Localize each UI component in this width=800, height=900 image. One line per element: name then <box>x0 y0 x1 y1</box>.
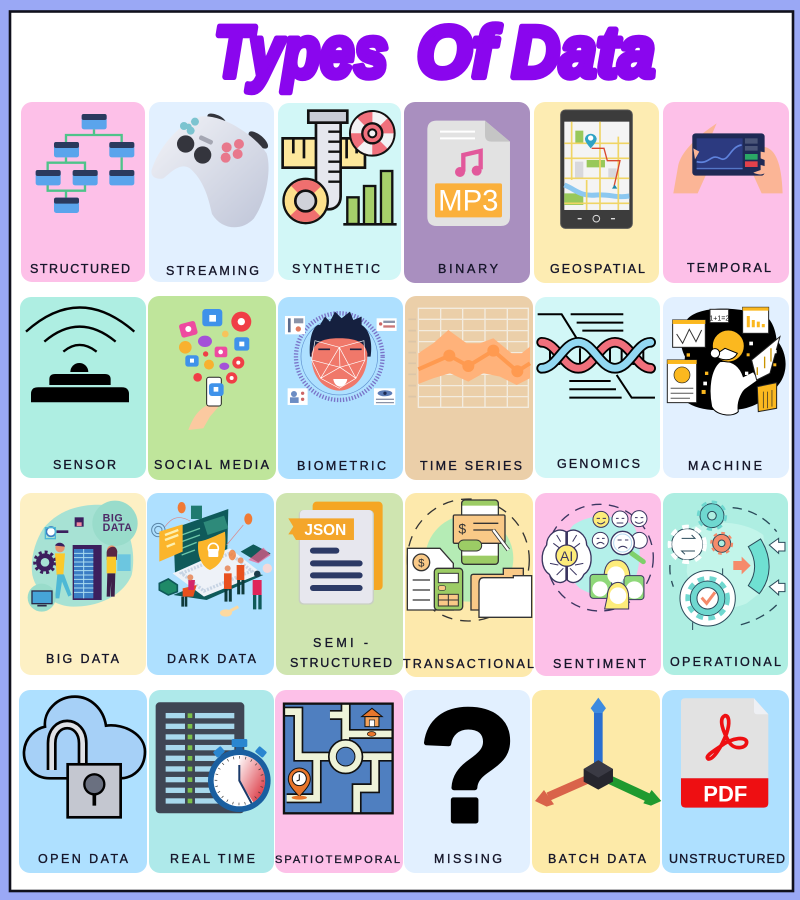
panel: structured <box>21 102 145 282</box>
icon: hierarchy tree <box>36 114 134 213</box>
icon: AI sentiment <box>542 504 653 611</box>
label: MACHINE <box>688 459 762 473</box>
title <box>214 13 655 93</box>
panel: real time <box>149 690 274 873</box>
panel: unstructured <box>662 690 789 873</box>
label: OPERATIONAL <box>670 655 781 669</box>
icon: MP3 file <box>427 121 510 226</box>
label: STRUCTURED <box>30 262 130 276</box>
panel: dark data <box>147 493 274 675</box>
icon: question mark: ? <box>419 676 517 855</box>
label: BATCH DATA <box>548 852 647 866</box>
icon: 3D axes <box>535 698 661 807</box>
panel: machine <box>663 297 789 478</box>
icon: route map <box>284 704 393 813</box>
panel: batch data <box>532 690 661 873</box>
icon: big data team: BIG <box>103 513 123 525</box>
label: BINARY <box>438 262 499 276</box>
label: BIOMETRIC <box>297 459 386 473</box>
label: UNSTRUCTURED <box>669 852 785 866</box>
label: GEOSPATIAL <box>550 262 645 276</box>
label: TEMPORAL <box>687 261 771 275</box>
icon: big data team: DATA <box>103 522 132 534</box>
icon: robot with data screens: 1+1=2 <box>709 316 729 323</box>
panel: social media <box>148 296 276 480</box>
label: SENSOR <box>53 458 116 472</box>
label: OPEN DATA <box>38 852 129 866</box>
icon: PDF file: PDF <box>703 782 747 807</box>
icon: server and stopwatch <box>156 702 271 813</box>
panel: streaming <box>149 102 274 282</box>
title: Data <box>512 13 655 93</box>
panel: missing <box>404 676 530 873</box>
panel: open data <box>19 690 147 873</box>
icon: MP3 file: MP3 <box>438 185 498 218</box>
panel: big data <box>20 493 146 675</box>
icon: synthetic data tools <box>282 110 397 224</box>
label: SPATIOTEMPORAL <box>275 854 400 866</box>
label <box>290 636 392 670</box>
icon: transaction documents: $ <box>458 521 466 537</box>
icon: social media reactions <box>178 309 251 430</box>
panel: time series <box>405 296 533 480</box>
label: SENTIMENT <box>553 657 646 671</box>
label: REAL TIME <box>170 852 255 866</box>
panel: synthetic <box>278 103 401 280</box>
icon: hands holding tablet <box>673 123 783 193</box>
chart: time series band <box>408 308 530 407</box>
label: BIG DATA <box>46 652 120 666</box>
label: SOCIAL MEDIA <box>154 458 270 472</box>
icon: game controller <box>151 111 271 227</box>
label: DARK DATA <box>167 652 257 666</box>
icon: cloud and open lock <box>24 697 145 817</box>
label: SYNTHETIC <box>292 262 380 276</box>
panel: transactional <box>403 493 534 677</box>
icon: PDF file <box>681 698 768 808</box>
panel: sentiment <box>535 493 661 676</box>
icon: JSON file: JSON <box>304 522 346 539</box>
label: GENOMICS <box>557 457 640 471</box>
icon: face recognition <box>285 312 397 405</box>
label: STREAMING <box>166 264 259 278</box>
label: TIME SERIES <box>420 459 522 473</box>
panel: biometric <box>278 297 403 479</box>
label: STRUCTURED <box>290 656 392 670</box>
icon: sensor signal <box>26 307 134 402</box>
panel: sensor <box>20 297 146 478</box>
label: MISSING <box>434 852 502 866</box>
panel: genomics <box>535 297 660 478</box>
icon: transaction documents <box>407 499 532 621</box>
title: Of <box>417 13 501 93</box>
panel: semi-structured <box>276 493 403 675</box>
icon: robot with data screens <box>667 307 786 415</box>
icon: DNA helix <box>538 314 655 398</box>
label: TRANSACTIONAL <box>403 657 534 671</box>
panel: spatiotemporal <box>275 690 403 873</box>
title: Types <box>214 13 388 93</box>
panel: temporal <box>663 102 789 283</box>
label: SEMI - <box>313 636 368 650</box>
panel: geospatial <box>534 102 659 283</box>
icon: transaction documents: $ <box>418 558 425 570</box>
panel: binary <box>404 102 530 283</box>
icon: data security scene <box>152 502 272 617</box>
icon: JSON file <box>288 502 383 605</box>
icon: operations gears <box>670 502 785 630</box>
icon: big data team <box>28 501 138 612</box>
icon: AI sentiment: AI <box>560 548 573 564</box>
icon: phone map <box>561 110 632 228</box>
panel: operational <box>663 493 788 675</box>
